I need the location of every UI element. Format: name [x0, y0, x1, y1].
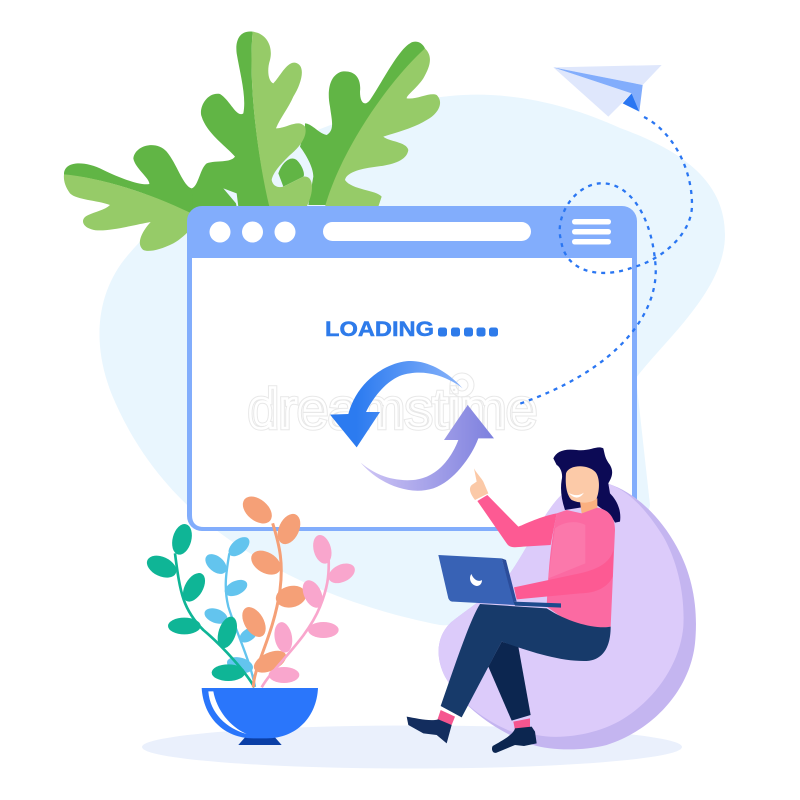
face [566, 466, 599, 503]
laptop [438, 555, 561, 608]
back leg [488, 642, 531, 721]
front leg [441, 604, 611, 717]
purple arrow [361, 405, 494, 491]
pot base [238, 737, 282, 745]
sweater [547, 508, 615, 628]
blue arrow [330, 361, 463, 447]
person on bean bag [407, 447, 696, 753]
left leaf [64, 145, 193, 251]
potted plant [143, 491, 358, 745]
window buttons [210, 222, 296, 242]
ground shadow [142, 726, 682, 768]
refresh arrows [330, 361, 494, 491]
paper plane [553, 65, 662, 117]
dashed flight path [516, 117, 692, 405]
smile [568, 493, 584, 498]
sweater light panel [548, 522, 585, 578]
watermark: dreamstime [248, 377, 537, 440]
bean bag [439, 481, 696, 749]
browser window [187, 206, 637, 531]
left shoe [407, 717, 452, 743]
loading label: LOADING [325, 318, 434, 341]
pot highlight [208, 691, 247, 734]
green leaves [64, 31, 440, 251]
orange branch [237, 491, 308, 687]
hair [553, 447, 620, 523]
green branch [143, 522, 254, 687]
lower arm [514, 550, 613, 599]
pot bowl [202, 688, 318, 738]
right leaf [278, 42, 440, 207]
loading dots [438, 328, 498, 336]
hand [470, 468, 488, 500]
pink branch [262, 533, 358, 687]
neck [580, 498, 597, 513]
watermark: dreamstime [248, 377, 537, 440]
middle leaf [188, 31, 312, 212]
menu icon [572, 219, 611, 244]
blue branch [202, 533, 260, 687]
address bar [323, 222, 531, 241]
background blob [99, 95, 725, 625]
right shoe [492, 727, 537, 753]
window content area [192, 258, 632, 527]
raised arm [477, 495, 557, 547]
socks [437, 710, 530, 730]
window frame [187, 206, 637, 531]
